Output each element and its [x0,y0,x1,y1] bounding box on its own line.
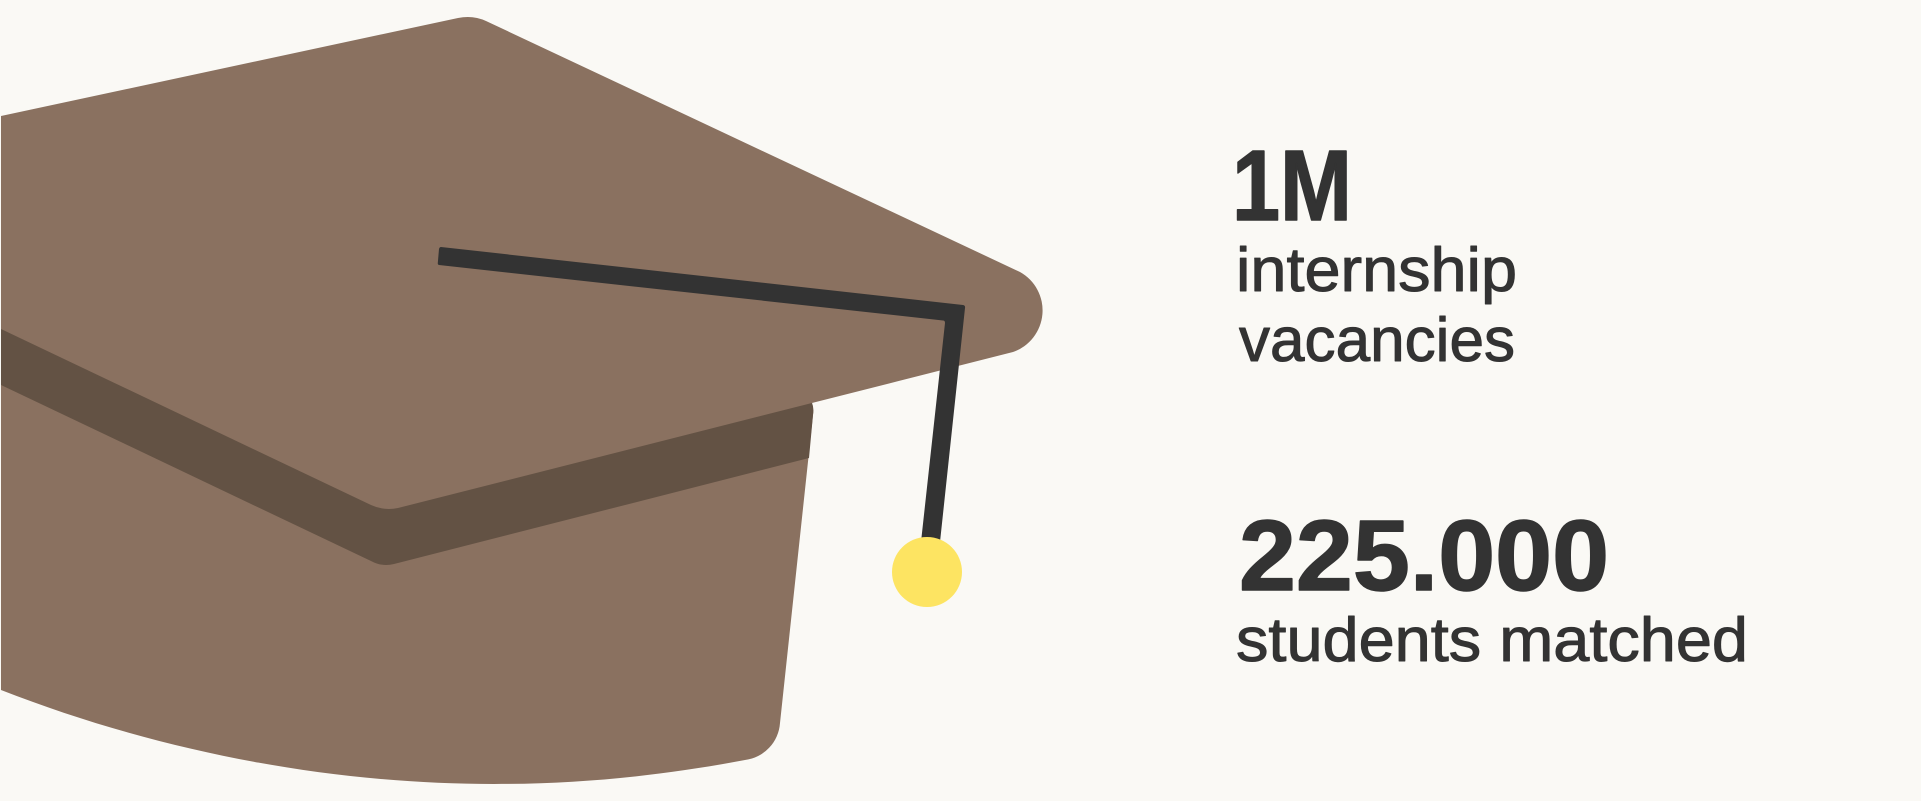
number: 225.000: 225.000 [1239,500,1609,612]
tassel cord [438,247,965,542]
label: students matched: students matched [1236,606,1748,675]
label: internship vacancies: internship [1236,236,1517,305]
cap board shadow [1,329,813,565]
label: internship vacancies [1236,236,1517,375]
tassel end [892,537,962,607]
cap body [1,290,813,784]
stat: internship vacancies [1232,130,1517,375]
label: internship vacancies: vacancies [1239,306,1515,375]
icon: graduation cap [1,17,1043,784]
number: 1M: 1M [1232,130,1352,242]
stat: students matched [1236,500,1748,675]
cap board [1,17,1043,509]
